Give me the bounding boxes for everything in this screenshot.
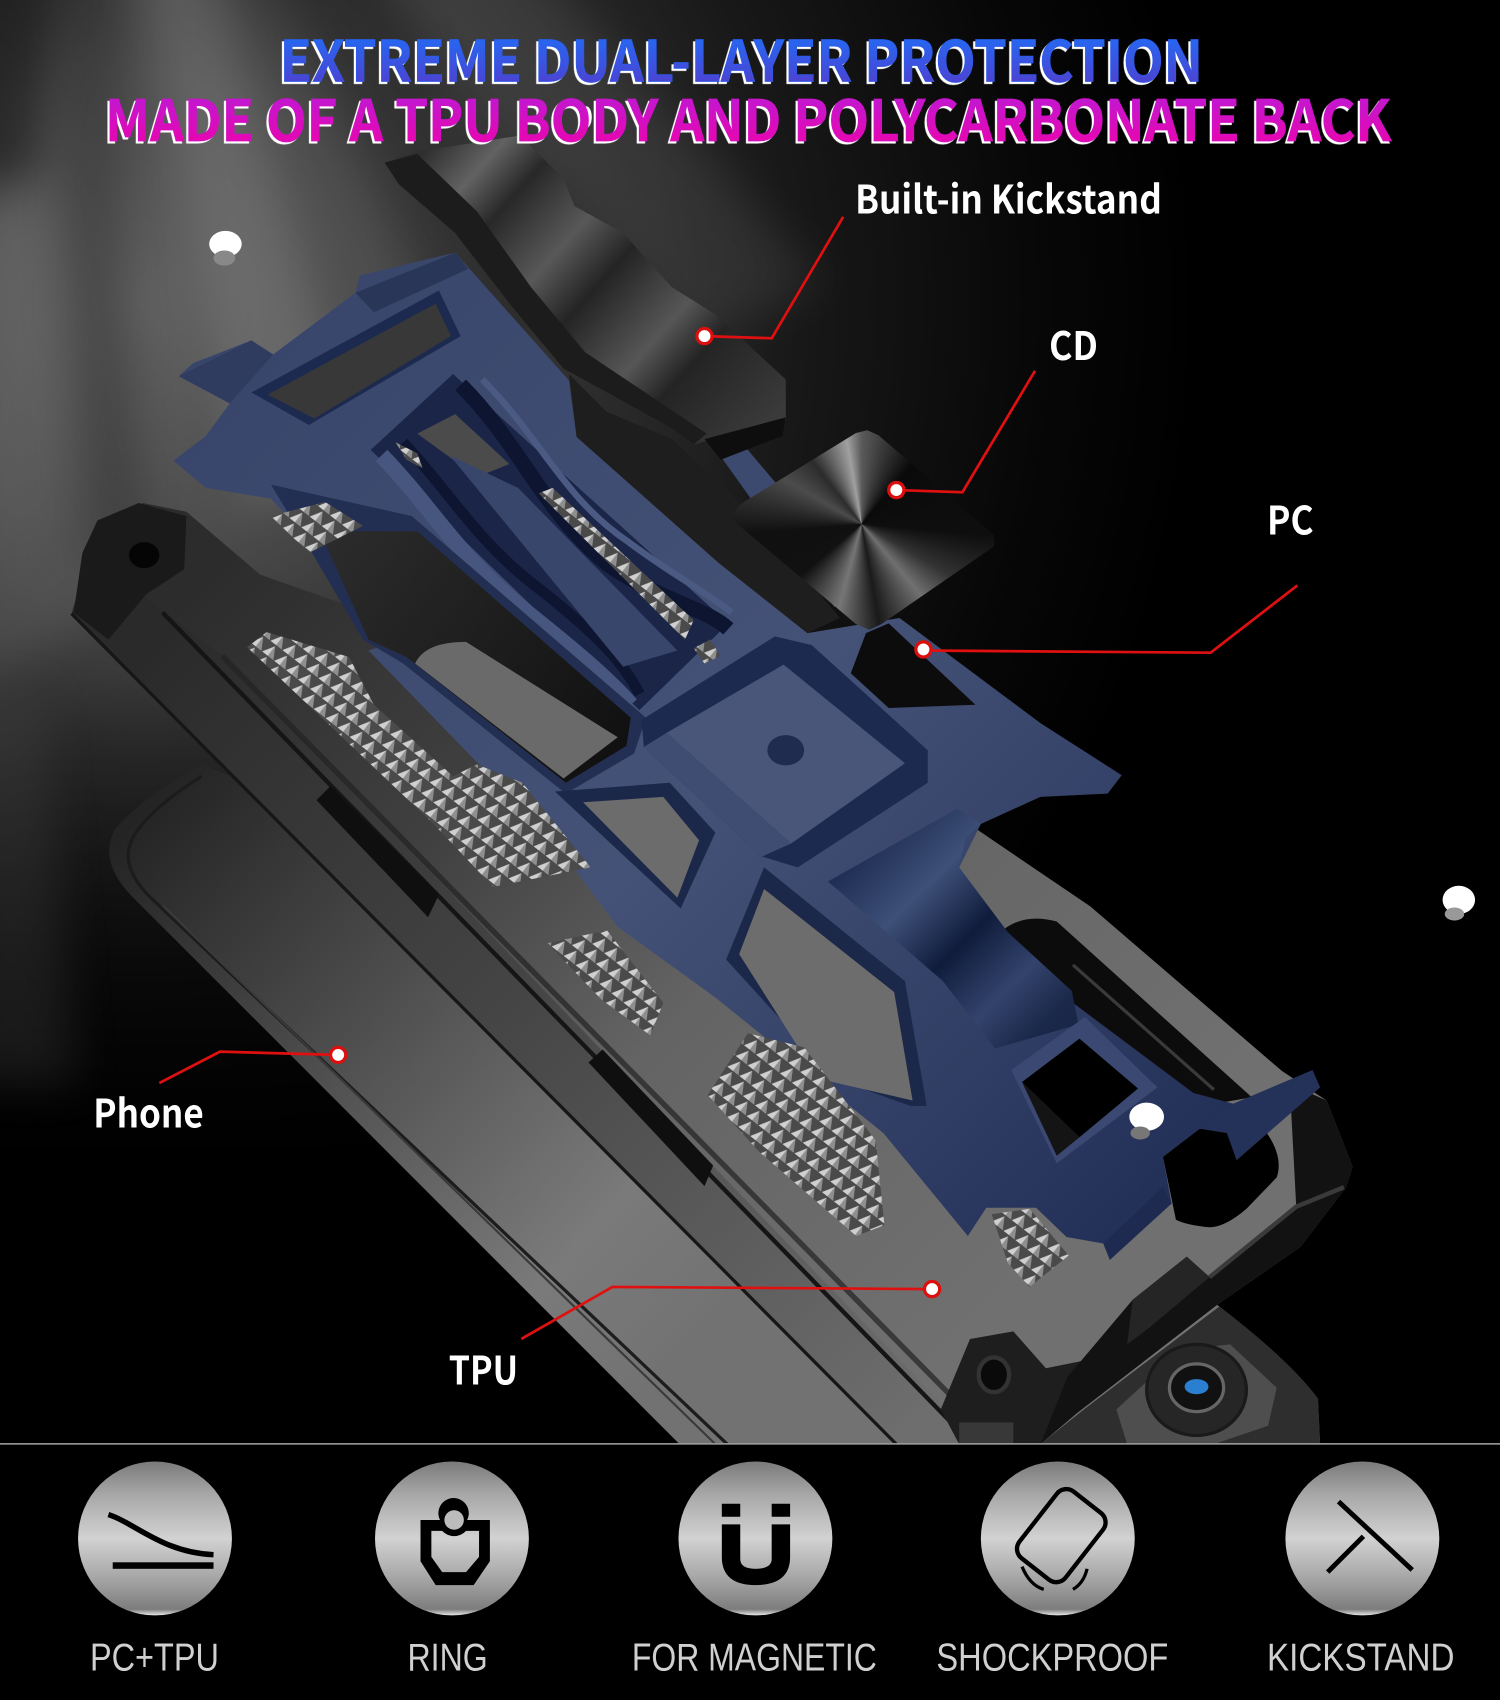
feature: KICKSTAND: KICKSTAND bbox=[1267, 1637, 1454, 1680]
callout: Phone bbox=[93, 1047, 346, 1140]
feature: RING bbox=[375, 1461, 529, 1680]
black window right bbox=[851, 623, 975, 708]
corner bumper top bbox=[74, 503, 186, 640]
callout: CD: CD bbox=[1049, 316, 1098, 372]
top tabs bbox=[179, 253, 468, 403]
TPU case bbox=[72, 503, 1353, 1444]
window tall bbox=[726, 867, 927, 1106]
bottom feature bar bbox=[0, 1443, 1500, 1700]
screws bbox=[209, 106, 1475, 1139]
right bumper bbox=[1040, 1084, 1353, 1444]
camera module bbox=[1040, 1306, 1320, 1444]
blue strip under kickstand bbox=[704, 434, 867, 607]
feature: KICKSTAND bbox=[1267, 1461, 1454, 1680]
center plate bbox=[642, 636, 928, 867]
end tab lower right bbox=[1103, 1070, 1320, 1260]
callout: Built-in Kickstand bbox=[697, 170, 1162, 344]
callout: PC: PC bbox=[1267, 490, 1314, 547]
title: EXTREME DUAL-LAYER PROTECTION bbox=[280, 17, 1203, 98]
studded grip patches bbox=[247, 502, 1069, 1287]
built-in kickstand piece bbox=[385, 136, 786, 460]
lens cutout bbox=[1163, 1128, 1279, 1227]
callout: CD bbox=[889, 316, 1098, 498]
feature: FOR MAGNETIC bbox=[632, 1461, 877, 1680]
callout: Built-in Kickstand: Built-in Kickstand bbox=[855, 170, 1162, 226]
callout: TPU bbox=[449, 1282, 940, 1397]
blue polycarbonate frame bbox=[173, 253, 1320, 1260]
phone body bbox=[109, 764, 1320, 1444]
window diamond bbox=[555, 783, 715, 909]
corner bumper bottom bbox=[941, 1331, 1084, 1444]
central stand slot bbox=[371, 374, 732, 710]
strap kickstand lower bbox=[828, 809, 1078, 1048]
square opening bbox=[1011, 1017, 1158, 1163]
CD disc bbox=[739, 430, 994, 630]
feature: SHOCKPROOF bbox=[936, 1461, 1168, 1680]
case upper right opening bbox=[1003, 919, 1252, 1106]
window top bbox=[251, 291, 461, 425]
left window bbox=[271, 485, 646, 794]
title: MADE OF A TPU BODY AND POLYCARBONATE BACK bbox=[105, 77, 1392, 158]
feature: SHOCKPROOF: SHOCKPROOF bbox=[936, 1637, 1168, 1680]
callout: PC bbox=[916, 490, 1314, 657]
dark gap between frame and kickstand bbox=[569, 374, 840, 633]
feature: PC+TPU: PC+TPU bbox=[90, 1637, 219, 1680]
title bbox=[105, 17, 1392, 158]
feature: RING: RING bbox=[408, 1637, 488, 1680]
callout: TPU: TPU bbox=[449, 1340, 518, 1397]
feature: PC+TPU bbox=[78, 1461, 232, 1680]
callout: Phone: Phone bbox=[93, 1084, 204, 1140]
feature: FOR MAGNETIC: FOR MAGNETIC bbox=[632, 1637, 877, 1680]
